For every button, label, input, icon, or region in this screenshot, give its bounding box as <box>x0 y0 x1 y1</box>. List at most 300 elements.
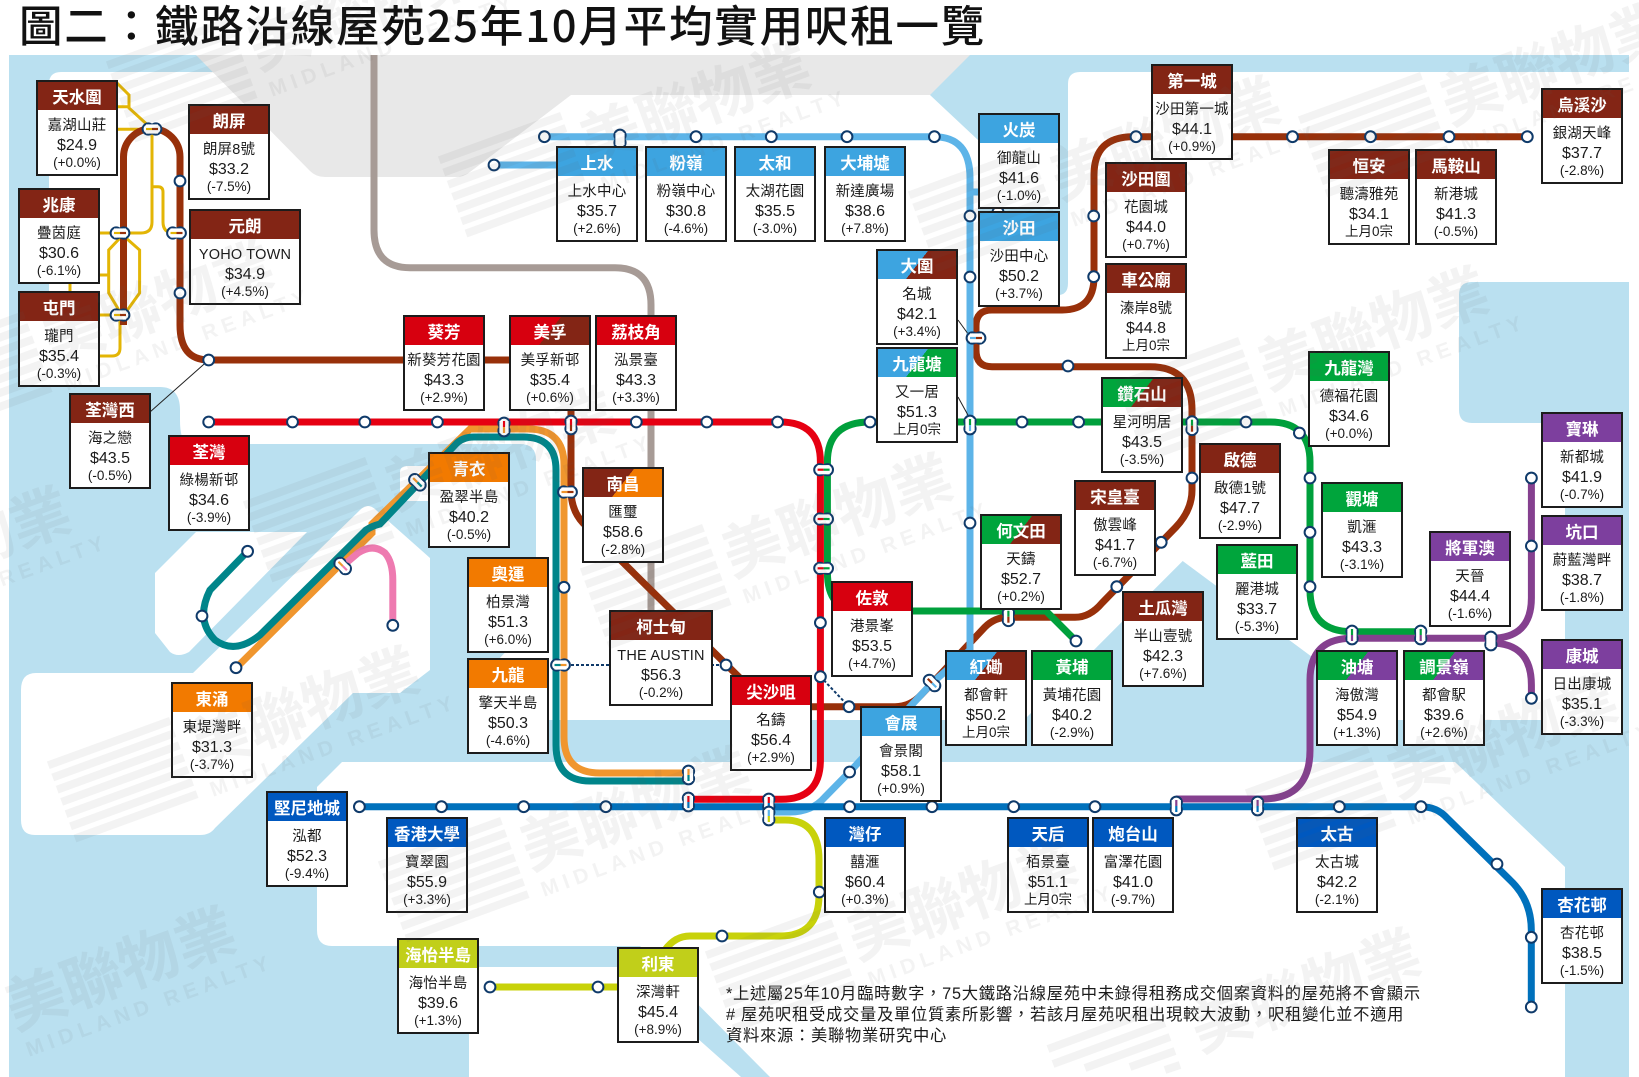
station: 大圍: 大圍 <box>900 258 934 276</box>
station: 香港大學: 寶翠園 <box>405 855 449 871</box>
station: 黃埔: $40.2 <box>1052 707 1092 724</box>
station: 調景嶺: (+2.6%) <box>1420 725 1468 740</box>
station: 九龍灣 <box>1308 351 1390 447</box>
light rail <box>70 83 174 356</box>
station: 烏溪沙: $37.7 <box>1562 145 1602 162</box>
station: 大埔墟: $38.6 <box>845 203 885 220</box>
station: 鑽石山: 星河明居 <box>1113 415 1171 431</box>
station: 火炭: 御龍山 <box>997 151 1041 167</box>
station: 油塘 <box>1316 650 1398 746</box>
station: 太和: 太湖花園 <box>746 184 804 200</box>
station: 粉嶺 <box>645 146 727 242</box>
station: 荔枝角: (+3.3%) <box>612 390 660 405</box>
station: 太古: (-2.1%) <box>1315 892 1359 907</box>
station: 太古: $42.2 <box>1317 874 1357 891</box>
station: 土瓜灣: $42.3 <box>1143 648 1183 665</box>
station: 佐敦: $53.5 <box>852 638 892 655</box>
station: 恒安: 聽濤雅苑 <box>1340 187 1398 203</box>
station: 炮台山: 富澤花園 <box>1104 855 1162 871</box>
station: 土瓜灣: 半山壹號 <box>1134 629 1192 645</box>
footnotes: *上述屬25年10月臨時數字，75大鐵路沿線屋苑中未錄得租務成交個案資料的屋苑將不會顯示 <box>726 985 1421 1003</box>
station: 沙田圍: (+0.7%) <box>1122 237 1170 252</box>
station: 馬鞍山: (-0.5%) <box>1434 224 1478 239</box>
station: 會展: (+0.9%) <box>877 781 925 796</box>
station: 佐敦 <box>831 581 913 677</box>
station: 馬鞍山: 新港城 <box>1434 187 1478 203</box>
station: 利東 <box>617 947 699 1043</box>
station: 天水圍 <box>36 80 118 176</box>
station: 寶琳: $41.9 <box>1562 469 1602 486</box>
station: 杏花邨: $38.5 <box>1562 945 1602 962</box>
station: 堅尼地城: 堅尼地城 <box>274 800 340 818</box>
station: 杏花邨: 杏花邨 <box>1560 926 1604 942</box>
station: 上水: 上水中心 <box>568 184 626 200</box>
station: 屯門: 屯門 <box>42 300 76 318</box>
station: 青衣: 青衣 <box>452 461 486 479</box>
station: 香港大學: 香港大學 <box>394 826 460 844</box>
station: 恒安: $34.1 <box>1349 206 1389 223</box>
station: 奧運: 柏景灣 <box>486 595 530 611</box>
line: Airport Express <box>204 437 688 781</box>
line: Tung Chung <box>236 429 688 773</box>
station: 調景嶺: 調景嶺 <box>1419 659 1469 677</box>
station: 紅磡: 上月0宗 <box>962 725 1010 740</box>
station: 元朗 <box>189 209 301 305</box>
station: 何文田: 何文田 <box>996 523 1046 541</box>
station: 會展: 會景閣 <box>879 744 923 760</box>
station: 烏溪沙 <box>1541 88 1623 184</box>
line: East Rail <box>494 137 985 812</box>
station: 兆康: 疊茵庭 <box>37 226 81 242</box>
station: 藍田: (-5.3%) <box>1235 619 1279 634</box>
station: 第一城 <box>1151 64 1233 160</box>
station: 南昌: 南昌 <box>606 476 640 494</box>
station: 觀塘: 觀塘 <box>1346 491 1378 509</box>
station: 油塘: (+1.3%) <box>1333 725 1381 740</box>
station: 海怡半島 <box>397 938 479 1034</box>
station: 大埔墟: (+7.8%) <box>841 221 889 236</box>
station: 荃灣: $34.6 <box>189 492 229 509</box>
station: 美孚: (+0.6%) <box>526 390 574 405</box>
station: 會展: 會展 <box>884 715 918 733</box>
station: 啟德 <box>1199 443 1281 539</box>
station: 葵芳: 葵芳 <box>428 324 460 342</box>
station: 油塘: 油塘 <box>1340 659 1374 677</box>
station: 康城: 康城 <box>1566 648 1598 666</box>
station: 粉嶺: 粉嶺中心 <box>657 184 715 200</box>
station: 火炭: 火炭 <box>1002 122 1036 140</box>
station: 灣仔: 灣仔 <box>848 826 882 844</box>
station: 太和: (-3.0%) <box>753 221 797 236</box>
station: 利東: 利東 <box>642 956 674 974</box>
station: 朗屏: $33.2 <box>209 161 249 178</box>
station: 紅磡: 都會軒 <box>964 688 1008 704</box>
station: 青衣: (-0.5%) <box>447 527 491 542</box>
station: 沙田圍: 花園城 <box>1124 200 1168 216</box>
station: 元朗: $34.9 <box>225 266 265 283</box>
station: 灣仔: $60.4 <box>845 874 885 891</box>
station: 海怡半島: (+1.3%) <box>414 1013 462 1028</box>
station: 兆康: 兆康 <box>42 197 76 215</box>
station: 葵芳: 新葵芳花園 <box>407 353 481 369</box>
station: 粉嶺: $30.8 <box>666 203 706 220</box>
station: 大圍 <box>876 249 958 345</box>
station: 太和 <box>734 146 816 242</box>
station: 土瓜灣 <box>1122 591 1204 687</box>
station: 九龍: (-4.6%) <box>486 733 530 748</box>
station: 荔枝角: $43.3 <box>616 372 656 389</box>
line: Tsuen Wan <box>209 422 820 799</box>
station: 柯士甸: 柯士甸 <box>636 619 686 637</box>
line: Disneyland <box>343 548 393 625</box>
station: 兆康 <box>18 188 100 284</box>
station: 沙田: (+3.7%) <box>995 286 1043 301</box>
station: 太古 <box>1296 817 1378 913</box>
station: 上水: (+2.6%) <box>573 221 621 236</box>
station: 宋皇臺: 宋皇臺 <box>1090 489 1140 507</box>
station: 美孚: 美孚 <box>534 324 566 342</box>
station: 天水圍: $24.9 <box>57 137 97 154</box>
station: 藍田: 麗港城 <box>1235 582 1279 598</box>
station: 香港大學: $55.9 <box>407 874 447 891</box>
station: 坑口: 坑口 <box>1566 524 1598 542</box>
station: 鑽石山: (-3.5%) <box>1120 452 1164 467</box>
station: 觀塘: $43.3 <box>1342 539 1382 556</box>
station: 烏溪沙: (-2.8%) <box>1560 163 1604 178</box>
station: 太古: 太古 <box>1320 826 1354 844</box>
station: 寶琳: 新都城 <box>1560 450 1604 466</box>
station: 沙田: 沙田中心 <box>990 249 1048 265</box>
station: 上水: 上水 <box>580 155 614 173</box>
station: 何文田: $52.7 <box>1001 571 1041 588</box>
station: 車公廟 <box>1105 263 1187 359</box>
station: 黃埔: (-2.9%) <box>1050 725 1094 740</box>
station: 香港大學 <box>386 817 468 913</box>
station: 觀塘 <box>1321 482 1403 578</box>
station: 康城: $35.1 <box>1562 696 1602 713</box>
station: 大圍: $42.1 <box>897 306 937 323</box>
station: 天后: 上月0宗 <box>1024 892 1072 907</box>
line: Tseung Kwan O <box>1176 478 1531 799</box>
footnotes <box>726 984 1421 1045</box>
station: 朗屏: (-7.5%) <box>207 179 251 194</box>
station: 坑口: 蔚藍灣畔 <box>1553 553 1611 569</box>
station: 荃灣西: $43.5 <box>90 450 130 467</box>
land: Tsing Yi <box>400 466 430 501</box>
station: 美孚 <box>509 315 591 411</box>
station: 康城: (-3.3%) <box>1560 714 1604 729</box>
station: 火炭: (-1.0%) <box>997 188 1041 203</box>
line: South Island <box>490 820 819 987</box>
station: 啟德: 啟德1號 <box>1214 481 1266 497</box>
station: 第一城: 沙田第一城 <box>1155 102 1229 118</box>
station: 佐敦: (+4.7%) <box>848 656 896 671</box>
station: 康城: 日出康城 <box>1553 677 1611 693</box>
station: 沙田: 沙田 <box>1002 220 1036 238</box>
station: 堅尼地城: (-9.4%) <box>285 866 329 881</box>
line: Tuen Ma <box>124 129 1527 707</box>
station: 將軍澳 <box>1429 531 1511 627</box>
station: 黃埔 <box>1031 650 1113 746</box>
station: 利東: 深灣軒 <box>636 985 680 1001</box>
station: 紅磡 <box>945 650 1027 746</box>
station: 元朗: 元朗 <box>228 218 262 236</box>
station: 海怡半島: $39.6 <box>418 995 458 1012</box>
station: 九龍灣: (+0.0%) <box>1325 426 1373 441</box>
station: 東涌 <box>171 682 253 778</box>
station: 火炭 <box>978 113 1060 209</box>
station: 荔枝角: 荔枝角 <box>611 324 661 342</box>
station: 天后: 天后 <box>1032 826 1064 844</box>
station: 鑽石山 <box>1101 377 1183 473</box>
station: 烏溪沙: 烏溪沙 <box>1557 97 1607 115</box>
station: 南昌: (-2.8%) <box>601 542 645 557</box>
station: 大埔墟 <box>824 146 906 242</box>
station: 屯門: $35.4 <box>39 348 79 365</box>
station: 黃埔: 黃埔花園 <box>1043 688 1101 704</box>
station: 天水圍: 天水圍 <box>52 89 102 107</box>
station: 藍田: $33.7 <box>1237 601 1277 618</box>
station: 沙田圍: 沙田圍 <box>1121 171 1171 189</box>
station: 沙田 <box>978 211 1060 307</box>
station: 炮台山: $41.0 <box>1113 874 1153 891</box>
station: 美孚: $35.4 <box>530 372 570 389</box>
station: 大埔墟: 新達廣場 <box>836 184 894 200</box>
station: 坑口: $38.7 <box>1562 572 1602 589</box>
station: 香港大學: (+3.3%) <box>403 892 451 907</box>
station: 九龍: 九龍 <box>492 667 524 685</box>
station: 朗屏 <box>188 104 270 200</box>
dotted walkway links <box>566 665 849 707</box>
station: 鑽石山: $43.5 <box>1122 434 1162 451</box>
station: 元朗: YOHO TOWN <box>199 247 291 263</box>
station: 柯士甸: THE AUSTIN <box>617 648 705 664</box>
station: 海怡半島: 海怡半島 <box>409 976 467 992</box>
station: 啟德: (-2.9%) <box>1218 518 1262 533</box>
station: 大埔墟: 大埔墟 <box>840 155 890 173</box>
station: 天后: 栢景臺 <box>1026 855 1070 871</box>
station: 何文田: (+0.2%) <box>997 589 1045 604</box>
station: 粉嶺: (-4.6%) <box>664 221 708 236</box>
station: 紅磡: $50.2 <box>966 707 1006 724</box>
station: 尖沙咀 <box>730 675 812 771</box>
station: 調景嶺 <box>1403 650 1485 746</box>
station: 九龍 <box>467 658 549 754</box>
station: 油塘: 海傲灣 <box>1335 688 1379 704</box>
station: 青衣 <box>428 452 510 548</box>
station: 荃灣: 綠楊新邨 <box>180 473 238 489</box>
station: 荃灣西 <box>69 393 151 489</box>
station: 柯士甸: $56.3 <box>641 667 681 684</box>
station: 宋皇臺 <box>1074 480 1156 576</box>
station: 九龍灣: $34.6 <box>1329 408 1369 425</box>
station: 尖沙咀: 尖沙咀 <box>746 684 796 702</box>
station: 東涌: 東堤灣畔 <box>183 720 241 736</box>
station: 南昌: $58.6 <box>603 524 643 541</box>
station: 寶琳 <box>1541 412 1623 508</box>
station: 沙田圍 <box>1105 162 1187 258</box>
station: 南昌: 匯璽 <box>608 505 638 521</box>
station: 寶琳: 寶琳 <box>1566 421 1598 439</box>
station: 太和: 太和 <box>758 155 792 173</box>
station: 大圍: 名城 <box>902 287 932 303</box>
station: 九龍灣: 德福花園 <box>1320 389 1378 405</box>
station: 東涌: (-3.7%) <box>190 757 234 772</box>
station: 鑽石山: 鑽石山 <box>1117 386 1167 404</box>
interchange stations <box>111 123 1497 825</box>
station: 馬鞍山 <box>1415 149 1497 245</box>
station: 康城 <box>1541 639 1623 735</box>
station: 奧運: $51.3 <box>488 614 528 631</box>
station: 九龍: $50.3 <box>488 715 528 732</box>
station: 柯士甸 <box>609 610 713 706</box>
station: 灣仔: (+0.3%) <box>841 892 889 907</box>
station: 火炭: $41.6 <box>999 170 1039 187</box>
station: 車公廟: $44.8 <box>1126 320 1166 337</box>
station: 土瓜灣: (+7.6%) <box>1139 666 1187 681</box>
station: 灣仔 <box>824 817 906 913</box>
line: Island <box>359 807 1531 1007</box>
station: 南昌 <box>582 467 664 563</box>
station: 恒安: 上月0宗 <box>1345 224 1393 239</box>
station: 九龍塘 <box>876 347 958 443</box>
station: 佐敦: 港景峯 <box>850 619 894 635</box>
station: 葵芳: (+2.9%) <box>420 390 468 405</box>
station: 第一城: (+0.9%) <box>1168 139 1216 154</box>
station: 何文田: 天鑄 <box>1006 552 1036 568</box>
land: Lantau <box>21 506 430 835</box>
station: 粉嶺: 粉嶺 <box>670 155 702 173</box>
station: 杏花邨 <box>1541 888 1623 984</box>
station: 藍田: 藍田 <box>1240 553 1274 571</box>
station: 屯門: 瓏門 <box>44 329 74 345</box>
station: 宋皇臺: $41.7 <box>1095 537 1135 554</box>
connector leaders <box>150 320 969 417</box>
station: 車公廟: 上月0宗 <box>1122 338 1170 353</box>
station: 將軍澳: (-1.6%) <box>1448 606 1492 621</box>
land: Chek Lap Kok <box>155 532 307 655</box>
station: 利東: (+8.9%) <box>634 1022 682 1037</box>
grey mainland <box>196 55 970 177</box>
footnotes: 資料來源：美聯物業研究中心 <box>726 1027 947 1045</box>
station: 天水圍: 嘉湖山莊 <box>48 118 106 134</box>
station: 將軍澳: 將軍澳 <box>1445 540 1495 558</box>
station: 藍田 <box>1216 544 1298 640</box>
station: 海怡半島: 海怡半島 <box>405 947 471 965</box>
station: 荔枝角: 泓景臺 <box>614 353 658 369</box>
station: 屯門 <box>18 291 100 387</box>
station: 馬鞍山: 馬鞍山 <box>1431 158 1481 176</box>
station: 油塘: $54.9 <box>1337 707 1377 724</box>
station: 荃灣西: 荃灣西 <box>85 402 135 420</box>
station: 東涌: 東涌 <box>196 691 228 709</box>
station: 九龍塘: $51.3 <box>897 404 937 421</box>
station: 恒安: 恒安 <box>1352 158 1386 176</box>
station: 調景嶺: 都會駅 <box>1422 688 1466 704</box>
station: 九龍塘: 上月0宗 <box>893 422 941 437</box>
station: 灣仔: 囍滙 <box>850 855 880 871</box>
station: 啟德: $47.7 <box>1220 500 1260 517</box>
land: Hong Kong Island <box>317 762 1565 1077</box>
station: 荃灣: 荃灣 <box>192 444 226 462</box>
line: Kwun Tong <box>827 422 1421 641</box>
station: 利東: $45.4 <box>638 1004 678 1021</box>
station: 荔枝角 <box>595 315 677 411</box>
station: 炮台山: (-9.7%) <box>1111 892 1155 907</box>
station: 佐敦: 佐敦 <box>856 590 888 608</box>
line: grey planned line <box>374 55 651 612</box>
station: 屯門: (-0.3%) <box>37 366 81 381</box>
station: 美孚: 美孚新邨 <box>521 353 579 369</box>
station: 恒安 <box>1328 149 1410 245</box>
station: 柯士甸: (-0.2%) <box>639 685 683 700</box>
station: 荃灣: (-3.9%) <box>187 510 231 525</box>
station: 炮台山 <box>1092 817 1174 913</box>
station: 葵芳 <box>403 315 485 411</box>
station: 杏花邨: 杏花邨 <box>1557 897 1607 915</box>
station: 坑口: (-1.8%) <box>1560 590 1604 605</box>
station: 兆康: $30.6 <box>39 245 79 262</box>
station: 啟德: 啟德 <box>1224 452 1256 470</box>
station: 土瓜灣: 土瓜灣 <box>1138 600 1188 618</box>
station: 朗屏: 朗屏 <box>212 113 246 131</box>
station: 天水圍: (+0.0%) <box>53 155 101 170</box>
station: 東涌: $31.3 <box>192 739 232 756</box>
station: 炮台山: 炮台山 <box>1108 826 1158 844</box>
station: 奧運: (+6.0%) <box>484 632 532 647</box>
station: 紅磡: 紅磡 <box>970 659 1002 677</box>
station: 元朗: (+4.5%) <box>221 284 269 299</box>
footnotes: # 屋苑呎租受成交量及單位質素所影響，若該月屋苑呎租出現較大波動，呎租變化並不適用 <box>726 1006 1404 1024</box>
station: 宋皇臺: (-6.7%) <box>1093 555 1137 570</box>
station: 調景嶺: $39.6 <box>1424 707 1464 724</box>
station: 何文田 <box>980 514 1062 610</box>
station: 沙田圍: $44.0 <box>1126 219 1166 236</box>
station: 觀塘: 凱滙 <box>1347 520 1377 536</box>
station: 兆康: (-6.1%) <box>37 263 81 278</box>
station: 黃埔: 黃埔 <box>1056 659 1088 677</box>
station: 太和: $35.5 <box>755 203 795 220</box>
station: 堅尼地城: $52.3 <box>287 848 327 865</box>
station: 沙田: $50.2 <box>999 268 1039 285</box>
station: 堅尼地城 <box>266 791 348 887</box>
station: 車公廟: 溱岸8號 <box>1120 301 1172 317</box>
station: 會展: $58.1 <box>881 763 921 780</box>
station: 奧運: 奧運 <box>492 566 524 584</box>
station: 第一城: $44.1 <box>1172 121 1212 138</box>
station: 九龍塘: 又一居 <box>895 385 939 401</box>
station: 尖沙咀: (+2.9%) <box>747 750 795 765</box>
station: 上水: $35.7 <box>577 203 617 220</box>
station: 車公廟: 車公廟 <box>1121 272 1171 290</box>
station: 上水 <box>556 146 638 242</box>
station: 九龍塘: 九龍塘 <box>892 356 942 374</box>
station: 朗屏: 朗屏8號 <box>203 142 255 158</box>
station: 荃灣西: (-0.5%) <box>88 468 132 483</box>
station: 寶琳: (-0.7%) <box>1560 487 1604 502</box>
land: Ap Lei Chau <box>469 967 741 1077</box>
station: 奧運 <box>467 557 549 653</box>
station: 會展 <box>860 706 942 802</box>
station: 將軍澳: 天晉 <box>1455 569 1485 585</box>
station: 將軍澳: $44.4 <box>1450 588 1490 605</box>
station: 荃灣 <box>168 435 250 531</box>
station: 天后 <box>1007 817 1089 913</box>
station: 太古: 太古城 <box>1315 855 1359 871</box>
station: 荃灣西: 海之戀 <box>88 431 132 447</box>
station: 青衣: $40.2 <box>449 509 489 526</box>
land: New Territories and Kowloon <box>49 72 1629 720</box>
